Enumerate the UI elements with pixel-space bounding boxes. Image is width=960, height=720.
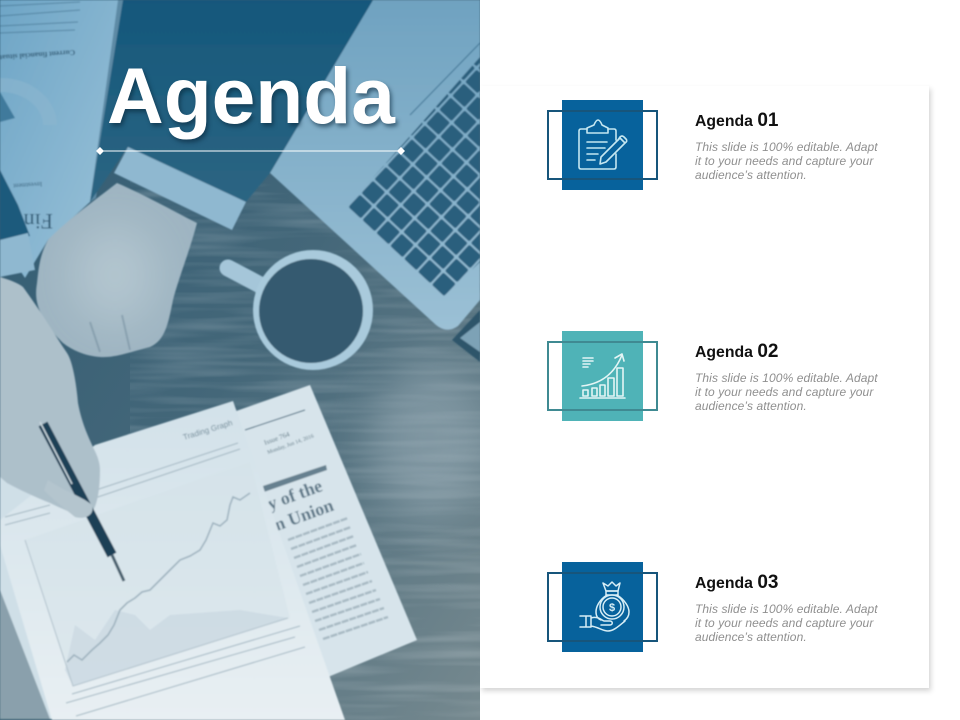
photo: desk with laptop, coffee and reports: y of the xyxy=(265,475,325,514)
item 1: icon tile xyxy=(547,100,658,190)
item 2: description: audience’s attention. xyxy=(695,399,807,413)
item 1: description: This slide is 100% editable. Adapt xyxy=(695,140,878,154)
finger over pen xyxy=(44,480,93,518)
graph axis xyxy=(25,540,288,686)
icon: money bag on hand: $ xyxy=(609,602,615,614)
shirt cuff xyxy=(114,147,246,230)
heading: Agenda: Agenda xyxy=(107,52,395,140)
item 2: heading: Agenda 02 xyxy=(695,341,778,362)
item 1: description: it to your needs and capture your xyxy=(695,154,873,168)
divider with diamond ends xyxy=(96,147,405,155)
item 1: description xyxy=(695,140,878,182)
laptop keyboard xyxy=(347,57,480,297)
item 3: heading: Agenda 03 xyxy=(695,572,778,593)
panel: white content card xyxy=(480,86,929,688)
sunlight on wood xyxy=(370,360,490,520)
icon: money bag on hand xyxy=(579,581,630,632)
coffee cup handle xyxy=(228,268,262,286)
front report with graph xyxy=(0,401,345,720)
left hand xyxy=(0,277,100,517)
report header lines xyxy=(5,443,305,716)
item 3: description: audience’s attention. xyxy=(695,630,807,644)
item 3: description: This slide is 100% editable. Adapt xyxy=(695,602,878,616)
photo: desk with laptop, coffee and reports: Monday, Jun 14, 2016 xyxy=(267,433,315,456)
icon: rising bar chart xyxy=(579,353,626,399)
suit sleeve xyxy=(90,0,373,202)
pen xyxy=(40,422,124,581)
graph panel xyxy=(25,462,290,686)
left sleeve and cuff xyxy=(0,170,30,240)
item 2: description xyxy=(695,371,878,413)
item 2: description: This slide is 100% editable. Adapt xyxy=(695,371,878,385)
wood grain texture xyxy=(130,180,480,720)
item 3: description: it to your needs and capture your xyxy=(695,616,873,630)
item 2: description: it to your needs and capture your xyxy=(695,385,873,399)
laptop corner below xyxy=(452,310,480,362)
item 3: icon tile xyxy=(547,562,658,652)
photo: desk with laptop, coffee and reports: Investment xyxy=(13,180,42,189)
item 3: description xyxy=(695,602,878,644)
item 1: description: audience’s attention. xyxy=(695,168,807,182)
laptop body xyxy=(270,0,480,330)
lower left paper stack xyxy=(0,455,120,719)
back newspaper xyxy=(225,385,417,677)
photo: desk with laptop, coffee and reports: Issue 764 xyxy=(263,430,291,447)
photo: desk with laptop, coffee and reports xyxy=(0,0,480,720)
coffee cup xyxy=(253,250,373,370)
item 2: icon tile xyxy=(547,331,658,421)
photo: desk with laptop, coffee and reports: Fin xyxy=(24,209,53,234)
photo: desk with laptop, coffee and reports: Trading Graph xyxy=(182,418,234,442)
report paper top left xyxy=(0,0,123,278)
graph area xyxy=(65,610,288,686)
report text lines xyxy=(0,2,80,33)
pie chart on report xyxy=(0,92,15,122)
item 1: heading: Agenda 01 xyxy=(695,110,778,131)
wood desk background xyxy=(0,0,480,720)
right hand xyxy=(36,183,197,357)
icon: clipboard with pencil xyxy=(578,119,628,170)
newspaper column text xyxy=(288,518,388,639)
stock line xyxy=(67,493,250,662)
photo: desk with laptop, coffee and reports: n Union xyxy=(272,495,336,535)
